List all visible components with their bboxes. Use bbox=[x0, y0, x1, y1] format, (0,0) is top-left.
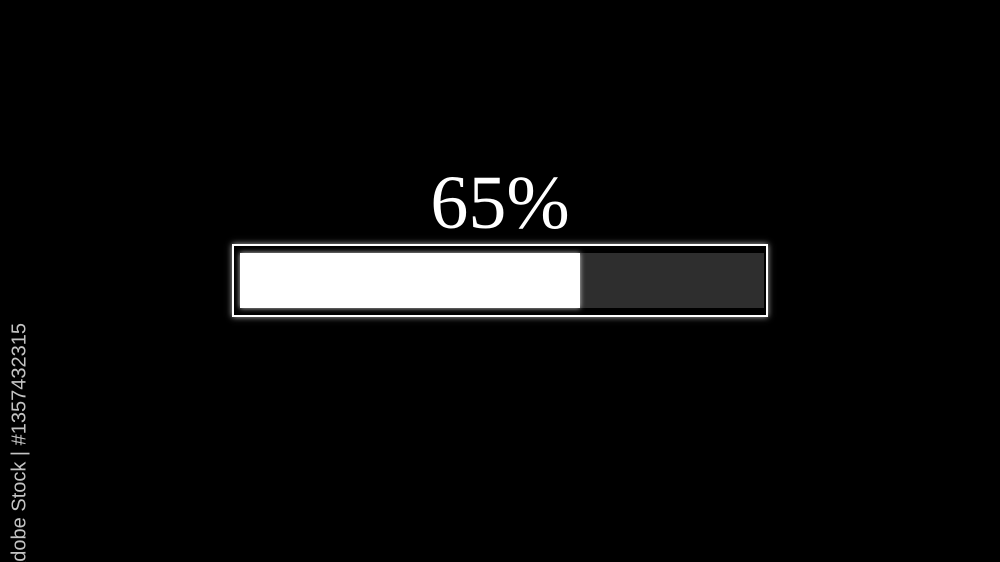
progress bar bbox=[232, 244, 768, 317]
progress track (empty) bbox=[240, 253, 764, 308]
title: percentage label: 65% bbox=[430, 161, 570, 245]
progress fill bbox=[240, 253, 580, 308]
